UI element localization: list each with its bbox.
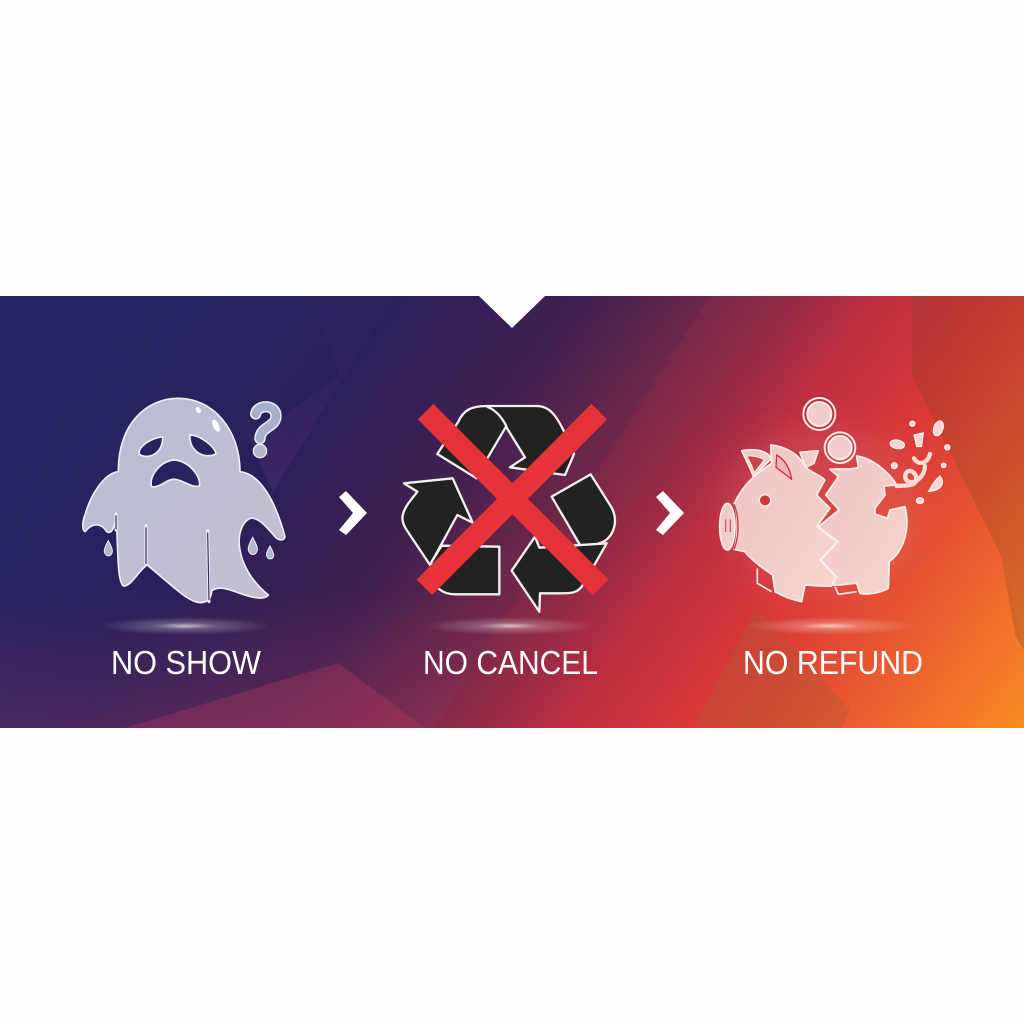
label: no cancel: NO CANCEL — [423, 644, 598, 681]
icon: coins — [803, 398, 855, 463]
label: no refund: NO REFUND — [743, 644, 923, 681]
icon: tear drops — [104, 537, 274, 559]
arrow: chevron two — [656, 491, 684, 535]
icon: right half of pig — [818, 456, 907, 594]
icon: ghost — [83, 398, 285, 603]
panel: gradient banner — [0, 296, 1024, 728]
icon: recycle symbol crossed out — [402, 406, 615, 612]
arrow: chevron one — [339, 491, 367, 535]
icon: left half of pig — [734, 445, 837, 602]
icon: floor glow under ghost — [100, 617, 270, 635]
icon: floor glow under piggy bank — [745, 617, 915, 635]
icon: broken piggy bank — [720, 398, 950, 602]
label: no show: NO SHOW — [111, 644, 262, 681]
icon: halo behind piggy bank — [720, 425, 920, 595]
icon: red cross — [424, 412, 601, 587]
icon: curling tail shred — [897, 454, 930, 486]
icon: question mark — [253, 407, 276, 458]
icon: back ear — [742, 450, 772, 477]
icon: snout — [720, 503, 735, 550]
icon: debris — [889, 420, 950, 504]
icon: floor glow under recycle symbol — [425, 617, 595, 635]
